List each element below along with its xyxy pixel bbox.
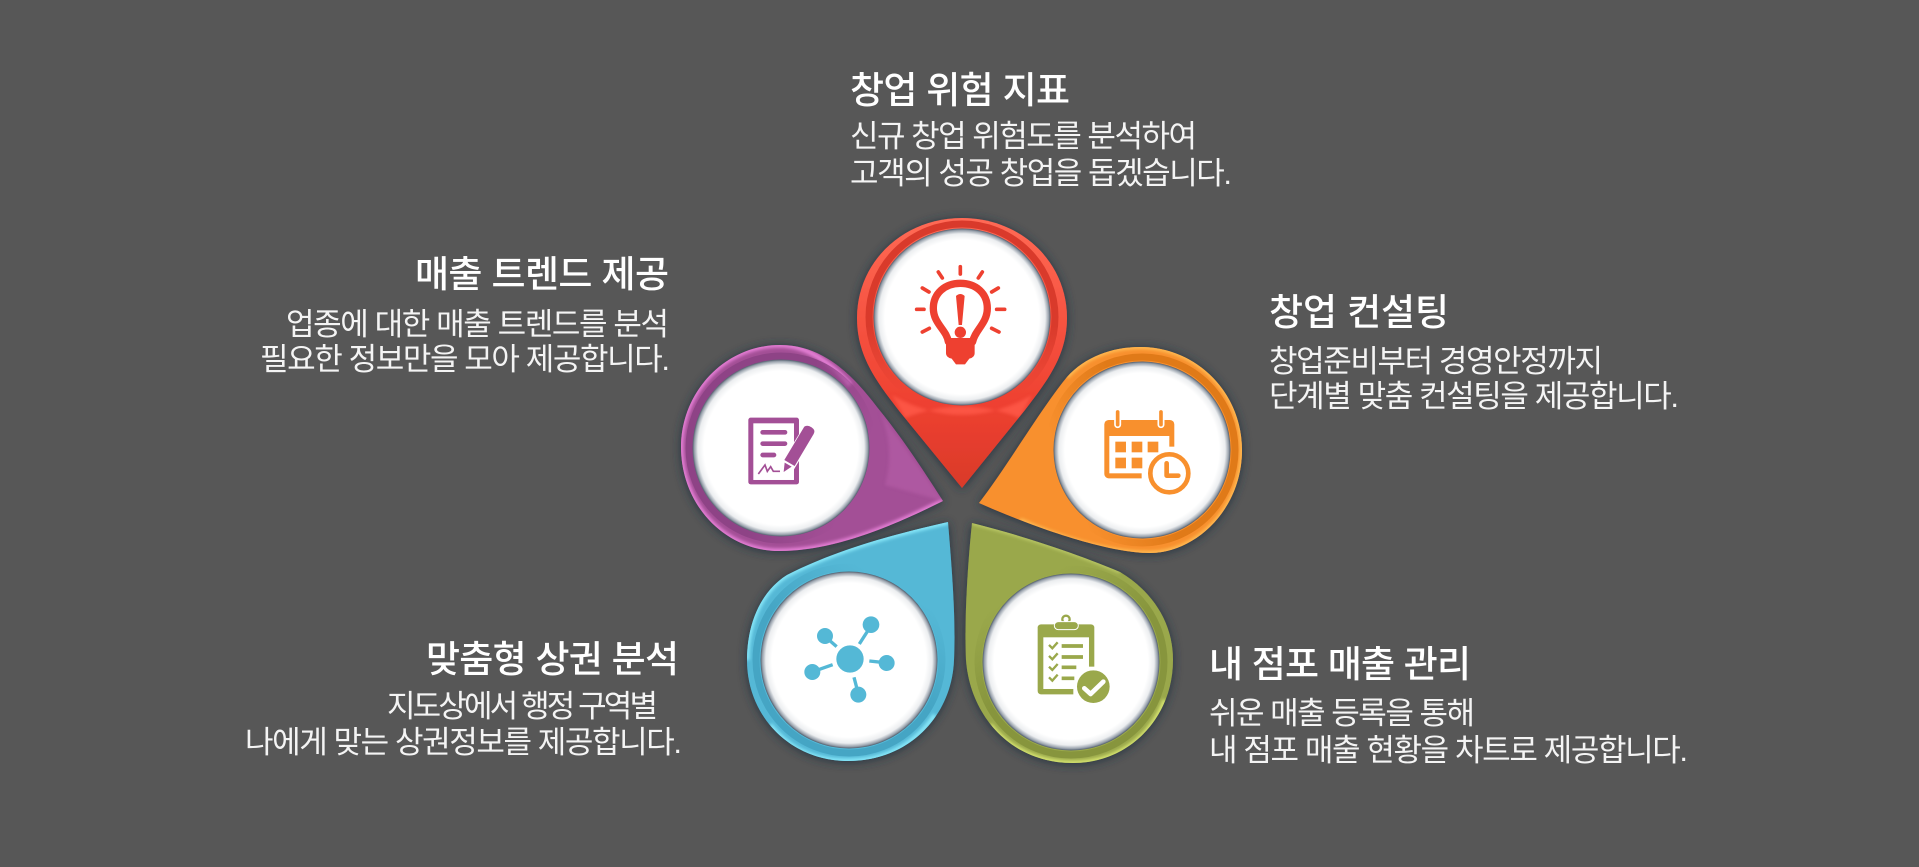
text block: startup risk index xyxy=(850,70,1232,191)
icon: clipboard checklist xyxy=(1038,616,1110,703)
heading: sales trend: 매출 트렌드 제공 xyxy=(415,254,669,295)
description: startup risk index xyxy=(850,119,1232,191)
description: custom trade area analysis: 나에게 맞는 상권정보를 제공합니다. xyxy=(245,725,682,760)
panel: blue pin, custom trade area analysis xyxy=(747,522,955,761)
panel: red pin, startup risk index xyxy=(857,218,1067,488)
icon: light bulb with exclamation mark xyxy=(917,267,1005,364)
heading: startup risk index: 창업 위험 지표 xyxy=(850,70,1070,111)
panel: purple pin, sales trend xyxy=(681,345,943,551)
icon: network nodes xyxy=(804,616,895,703)
description: custom trade area analysis xyxy=(245,689,682,760)
description: sales trend: 필요한 정보만을 모아 제공합니다. xyxy=(260,342,670,377)
icon: document with pen xyxy=(748,418,817,484)
text block: startup consulting xyxy=(1269,292,1679,414)
description: sales trend: 업종에 대한 매출 트렌드를 분석 xyxy=(286,307,669,342)
description: startup risk index: 고객의 성공 창업을 돕겠습니다. xyxy=(850,156,1232,191)
description: my store sales xyxy=(1209,696,1688,768)
description: startup risk index: 신규 창업 위험도를 분석하여 xyxy=(850,119,1197,154)
panel: green pin, my store sales xyxy=(965,523,1173,763)
text block: sales trend xyxy=(260,254,670,377)
description: my store sales: 내 점포 매출 현황을 차트로 제공합니다. xyxy=(1209,733,1688,768)
heading: custom trade area analysis: 맞춤형 상권 분석 xyxy=(426,639,679,680)
heading: startup consulting: 창업 컨설팅 xyxy=(1269,292,1449,333)
description: custom trade area analysis: 지도상에서 행정 구역별 xyxy=(387,689,658,724)
panel: orange pin, startup consulting xyxy=(979,347,1242,553)
description: startup consulting xyxy=(1269,344,1679,414)
text block: my store sales xyxy=(1209,644,1688,768)
description: my store sales: 쉬운 매출 등록을 통해 xyxy=(1209,696,1475,731)
description: startup consulting: 창업준비부터 경영안정까지 xyxy=(1269,344,1603,379)
description: sales trend xyxy=(260,307,670,377)
description: startup consulting: 단계별 맞춤 컨설팅을 제공합니다. xyxy=(1269,379,1679,414)
icon: calendar with clock xyxy=(1104,409,1189,493)
heading: my store sales: 내 점포 매출 관리 xyxy=(1209,644,1471,685)
text block: custom trade area analysis xyxy=(245,639,682,760)
